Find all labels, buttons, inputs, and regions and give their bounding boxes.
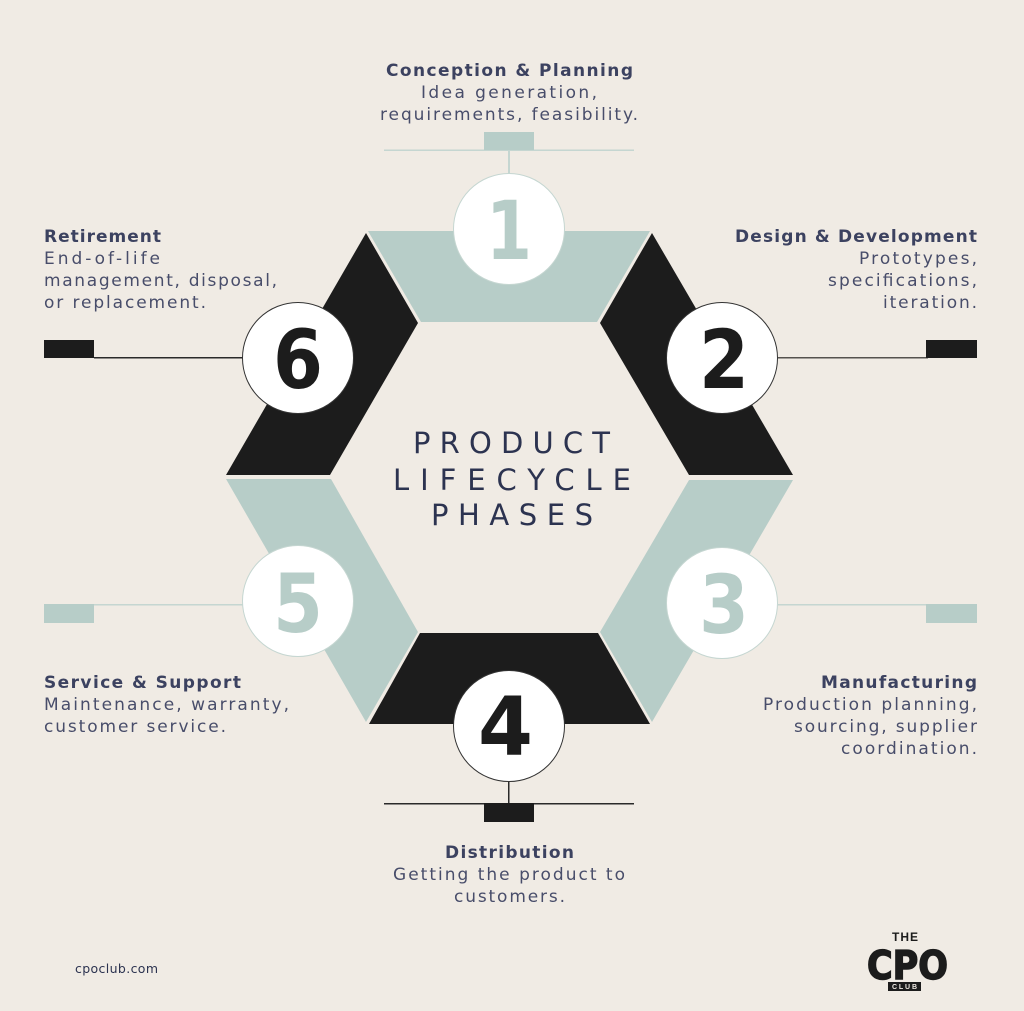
number badge 1: 1: [486, 185, 532, 279]
text block: Design & Development: Design & Development: [735, 227, 977, 247]
text block: Design & Development: Prototypes,: [859, 249, 977, 269]
text block: Distribution: [393, 843, 625, 907]
number badge 5: [242, 546, 354, 656]
logo: The CPO Club: [867, 930, 948, 991]
text block: Retirement: management, disposal,: [44, 271, 277, 291]
text block: Conception & Planning: Conception & Planning: [386, 61, 633, 81]
text block: Service & Support: [44, 673, 289, 737]
text block: Retirement: [44, 227, 277, 313]
hexagon segment 6: [226, 233, 418, 475]
title: [393, 426, 631, 532]
number badge 6: 6: [273, 314, 323, 408]
title: PRODUCT: [413, 426, 610, 460]
text block: Retirement: End-of-life: [44, 249, 160, 269]
text block: Design & Development: specifications,: [828, 271, 977, 291]
connector 5: [44, 604, 244, 623]
title: PHASES: [431, 498, 593, 532]
connector 1: [384, 132, 634, 175]
hexagon segment 3: [600, 480, 793, 722]
connector 2: [778, 340, 977, 358]
number badge 5: 5: [273, 558, 323, 652]
text block: Manufacturing: Manufacturing: [821, 673, 977, 693]
text block: Conception & Planning: [380, 61, 638, 125]
text block: Conception & Planning: Idea generation,: [421, 83, 597, 103]
number badge 3: 3: [699, 559, 749, 653]
connector 4: [384, 781, 634, 822]
logo: The CPO Club: THE: [892, 930, 918, 944]
connector 6: [44, 340, 244, 358]
text block: Service & Support: Service & Support: [44, 673, 241, 693]
text block: Manufacturing: sourcing, supplier: [794, 717, 977, 737]
connector 3: [778, 604, 977, 623]
number badge 6: [242, 302, 354, 414]
text block: Design & Development: iteration.: [883, 293, 977, 313]
text block: Distribution: Distribution: [445, 843, 574, 863]
text block: Retirement: or replacement.: [44, 293, 206, 313]
text block: Manufacturing: Production planning,: [763, 695, 977, 715]
text block: Manufacturing: [763, 673, 977, 759]
number badge 3: [666, 548, 778, 658]
text block: Design & Development: [735, 227, 977, 313]
text block: Retirement: Retirement: [44, 227, 161, 247]
logo: The CPO Club: CLUB: [892, 984, 917, 991]
number badge 1: [454, 174, 564, 284]
hexagon segment 2: [600, 233, 793, 475]
number badge 2: 2: [699, 314, 749, 408]
hexagon segment 1: [368, 231, 650, 322]
text block: Distribution: Getting the product to: [393, 865, 625, 885]
hexagon segment 4: [369, 633, 650, 724]
title: LIFECYCLE: [393, 463, 631, 497]
hexagon segment 5: [226, 479, 418, 722]
number badge 4: [454, 670, 564, 782]
text block: Service & Support: Maintenance, warranty,: [44, 695, 289, 715]
text block: Manufacturing: coordination.: [841, 739, 977, 759]
logo: The CPO Club: CPO: [867, 944, 948, 989]
website footer: cpoclub.com: [75, 961, 158, 976]
number badge 2: [666, 302, 778, 414]
text block: Conception & Planning: requirements, feasibility.: [380, 105, 638, 125]
text block: Service & Support: customer service.: [44, 717, 226, 737]
text block: Distribution: customers.: [454, 887, 565, 907]
number badge 4: 4: [478, 681, 533, 775]
